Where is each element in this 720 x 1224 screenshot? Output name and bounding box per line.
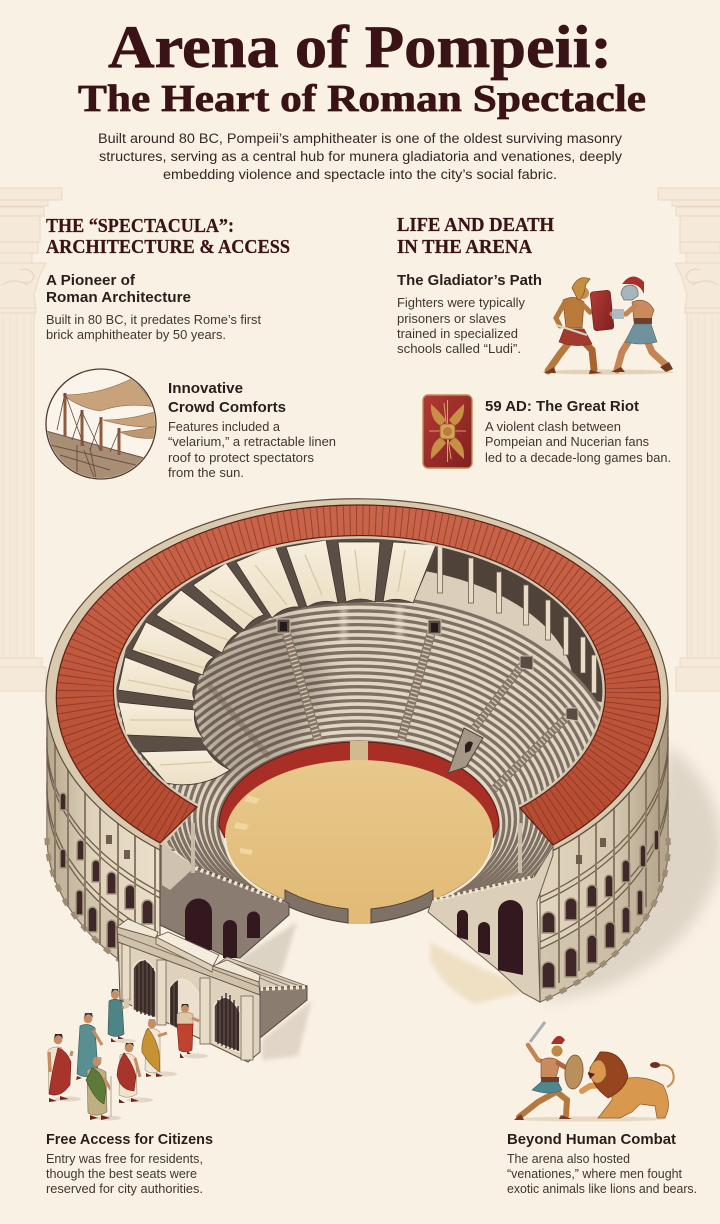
outer wall: right [540, 697, 668, 1002]
text block: free access for citizens: reserved for city authorities. [46, 1182, 203, 1196]
text block: free access for citizens: Entry was free for residents, [46, 1152, 203, 1166]
text block: beyond human combat: The arena also hosted [507, 1152, 630, 1166]
text block: innovative crowd comforts: roof to protect spectators [168, 451, 314, 465]
arena wall [219, 728, 499, 838]
gate columns [122, 944, 253, 1060]
citizen: red at gate [177, 1004, 208, 1058]
ground shadows [240, 745, 720, 1060]
text block: gladiator's path: prisoners or slaves [397, 312, 506, 326]
text block: 59 AD great riot: led to a decade-long games ban. [485, 451, 671, 465]
title: Arena of Pompeii: [108, 14, 612, 80]
text block: innovative crowd comforts: Features included a [168, 420, 280, 434]
text block: innovative crowd comforts: Crowd Comforts [168, 399, 286, 416]
heading: architecture and access: THE “SPECTACULA”: [46, 215, 234, 237]
text block: innovative crowd comforts [168, 380, 336, 480]
text block: free access for citizens: though the best seats were [46, 1167, 197, 1181]
text block: a pioneer of roman architecture: brick amphitheater by 50 years. [46, 328, 226, 342]
cut section: right [428, 823, 553, 1002]
icon: roman shield [423, 395, 472, 468]
text block: beyond human combat [507, 1131, 697, 1196]
text block: innovative crowd comforts: from the sun. [168, 466, 244, 480]
text block: gladiator's path: The Gladiator’s Path [397, 272, 542, 289]
gate entablature [117, 919, 260, 995]
text block: beyond human combat: “venationes,” where men fought [507, 1167, 683, 1181]
heading: architecture and access [46, 215, 290, 258]
heading: life and death: IN THE ARENA [397, 236, 533, 258]
intro text: embedding violence and spectacle into the city’s social fabric. [163, 167, 557, 182]
citizen: green elder [86, 1057, 121, 1120]
text block: 59 AD great riot: A violent clash between [485, 420, 621, 434]
citizen: yellow [142, 1019, 177, 1077]
text block: free access for citizens: Free Access for Citizens [46, 1131, 213, 1148]
text block: beyond human combat: exotic animals like lions and bears. [507, 1182, 697, 1196]
background column: right [658, 188, 720, 691]
heading: life and death: LIFE AND DEATH [397, 214, 554, 236]
citizen: red left [48, 1034, 81, 1102]
text block: innovative crowd comforts: “velarium,” a retractable linen [168, 435, 336, 449]
text block: beyond human combat: Beyond Human Combat [507, 1131, 676, 1148]
text block: a pioneer of roman architecture: A Pioneer of [46, 272, 136, 289]
gate arches [133, 960, 240, 1052]
text block: gladiator's path: Fighters were typically [397, 296, 526, 310]
intro text: structures, serving as a central hub for munera gladiatoria and venationes, deeply [99, 149, 622, 164]
title [78, 14, 646, 120]
icon: two gladiators fighting [542, 276, 674, 374]
text block: a pioneer of roman architecture: Built in 80 BC, it predates Rome’s first [46, 313, 262, 327]
text block: free access for citizens [46, 1131, 213, 1196]
title: The Heart of Roman Spectacle [78, 78, 646, 120]
cut section: left [160, 823, 289, 958]
tiled roof ring [56, 505, 660, 867]
intro text: Built around 80 BC, Pompeii’s amphitheater is one of the oldest surviving masonry [98, 131, 622, 146]
text block: innovative crowd comforts: Innovative [168, 380, 243, 397]
aisles and upper entrances [207, 619, 578, 790]
heading: architecture and access: ARCHITECTURE & ACCESS [46, 236, 290, 258]
velarium canopy [115, 537, 438, 785]
citizens group [48, 989, 208, 1120]
cavea base and upper gallery [116, 546, 602, 706]
intro text [98, 131, 622, 182]
text block: gladiator's path: trained in specialized [397, 327, 518, 341]
heading: life and death [397, 214, 554, 258]
entrance gateway with stairs [117, 919, 307, 1062]
colonnade [438, 543, 596, 693]
text block: gladiator's path [397, 272, 542, 356]
text block: a pioneer of roman architecture: Roman Architecture [46, 289, 191, 306]
citizen: red middle [117, 1043, 153, 1103]
rim [46, 499, 668, 854]
background column: left [0, 188, 62, 691]
icon: gladiator fighting a lion [514, 1022, 674, 1122]
text block: 59 AD great riot [485, 398, 671, 465]
citizen: teal [76, 1013, 102, 1080]
arena floor [225, 760, 493, 924]
outer wall: left [47, 697, 160, 985]
seating rows [117, 600, 601, 900]
text block: gladiator's path: schools called “Ludi”. [397, 342, 521, 356]
text block: a pioneer of roman architecture [46, 272, 262, 342]
icon: velarium roof circle [46, 369, 158, 482]
text block: 59 AD great riot: 59 AD: The Great Riot [485, 398, 639, 415]
text block: 59 AD great riot: Pompeian and Nucerian fans [485, 435, 649, 449]
amphitheater [46, 499, 668, 1002]
citizen: teal with scroll [108, 989, 136, 1043]
